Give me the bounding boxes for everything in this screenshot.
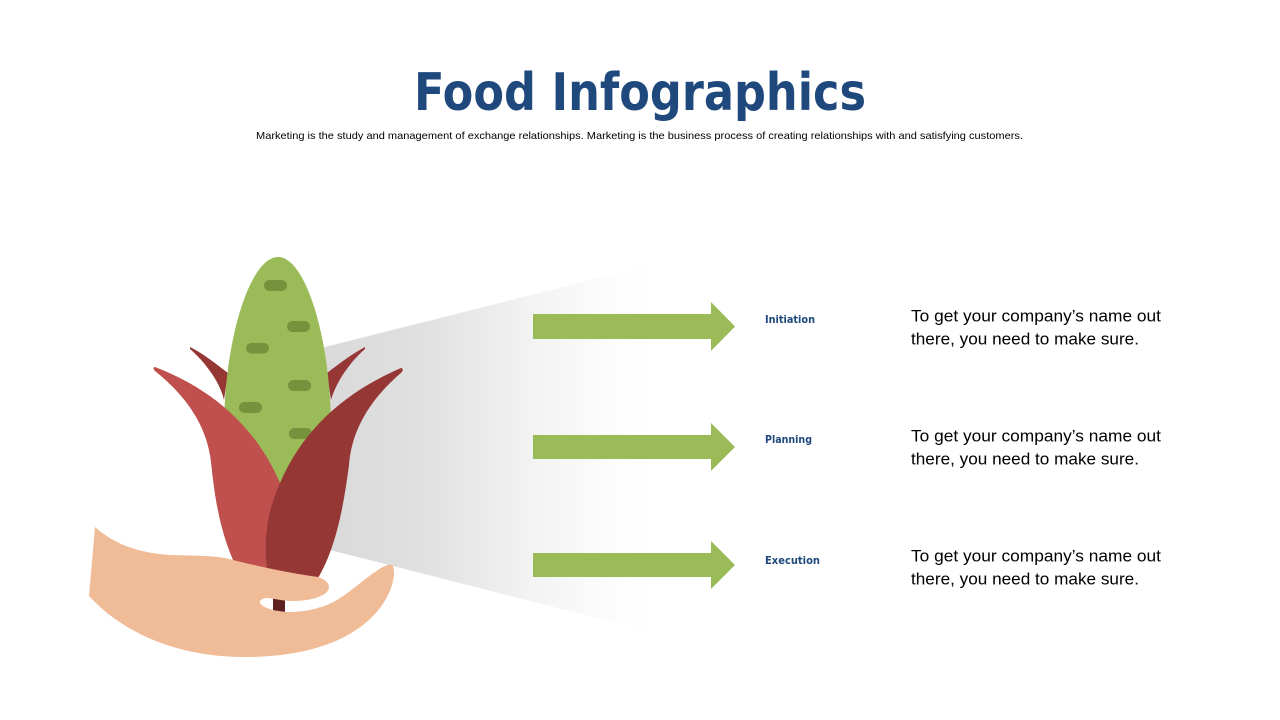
label: Planning: Planning [765, 434, 812, 446]
label: Initiation: Initiation [765, 314, 815, 326]
title: Food Infographics [414, 63, 866, 123]
arrow 1 [533, 302, 735, 351]
description 1: there, you need to make sure. [911, 330, 1139, 348]
corn cob [224, 257, 331, 495]
hand [89, 527, 394, 657]
description 2: there, you need to make sure. [911, 450, 1139, 468]
arrow 3 [533, 541, 735, 589]
description 2: To get your company’s name out [911, 426, 1161, 446]
arrow 2 [533, 423, 735, 471]
left husk leaf [154, 367, 290, 580]
illustration: corn in hand [89, 257, 403, 657]
back left leaf [190, 347, 228, 400]
right husk leaf [266, 368, 403, 578]
corn kernels [239, 280, 312, 439]
stem [273, 595, 285, 612]
grey light beam [320, 264, 652, 632]
label: Execution: Execution [765, 555, 820, 567]
subtitle: Marketing is the study and management of exchange relationships. Marketing is the business process of creating relationships with and satisfying customers. [256, 130, 1023, 142]
description 1: To get your company’s name out [911, 306, 1161, 326]
description 3: there, you need to make sure. [911, 570, 1139, 588]
description 3: To get your company’s name out [911, 546, 1161, 566]
back right leaf [327, 347, 365, 400]
